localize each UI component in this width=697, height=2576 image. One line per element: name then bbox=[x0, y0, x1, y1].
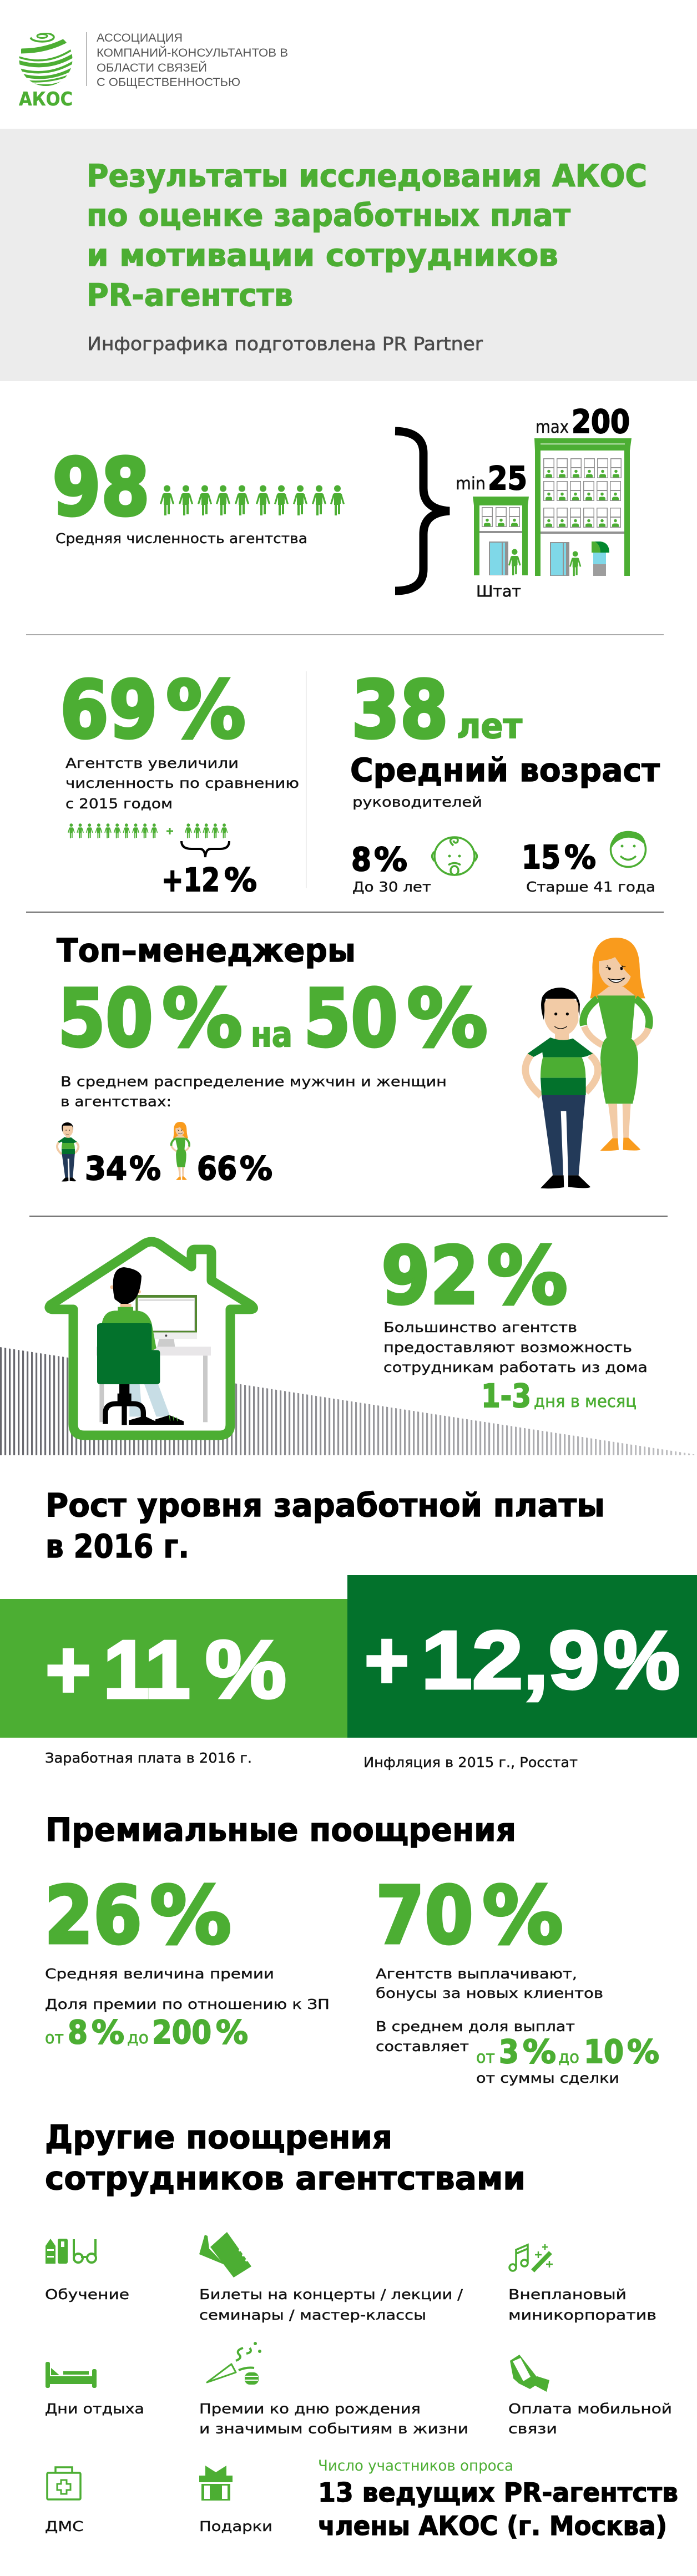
item: health insurance: ДМС bbox=[45, 2518, 84, 2534]
number 92 percent: 92 bbox=[381, 1229, 479, 1322]
association name: КОМПАНИЙ-КОНСУЛЬТАНТОВ В bbox=[97, 46, 288, 59]
bar: inflation: + bbox=[365, 1615, 409, 1706]
icon: small woman bbox=[171, 1122, 189, 1180]
bar: inflation: 12,9 bbox=[421, 1615, 599, 1706]
stat: over 41: % bbox=[564, 838, 596, 876]
icon: small people bbox=[68, 823, 228, 838]
bonus size text: Средняя величина премии bbox=[45, 1966, 274, 1982]
gender distribution text bbox=[60, 1074, 447, 1110]
stat: under 30: 8 bbox=[351, 841, 371, 878]
icon: curly brace bbox=[395, 431, 449, 591]
icon: bed bbox=[46, 2362, 97, 2388]
item: tickets bbox=[199, 2232, 463, 2323]
stat: women share: % bbox=[240, 1150, 272, 1187]
header logo bbox=[18, 32, 288, 110]
item: corporate party bbox=[508, 2244, 656, 2323]
item: mobile bill: Оплата мобильной bbox=[508, 2401, 672, 2417]
growth text: численность по сравнению bbox=[65, 775, 299, 791]
plus 12 percent: +12 bbox=[161, 861, 220, 899]
staff label: Штат bbox=[476, 582, 521, 600]
illustration: house with worker bbox=[49, 1242, 254, 1435]
item: health insurance bbox=[45, 2467, 84, 2534]
range 8 to 200 percent: % bbox=[216, 2013, 248, 2051]
range 8 to 200 percent bbox=[45, 2013, 248, 2051]
new client bonus text: Агентств выплачивают, bbox=[376, 1966, 577, 1982]
plus 12 percent: % bbox=[224, 861, 257, 899]
stat: women share bbox=[197, 1150, 272, 1187]
50 on 50 percent: % bbox=[407, 972, 488, 1065]
stat: under 30 bbox=[351, 841, 431, 895]
number 92 percent: % bbox=[487, 1229, 568, 1322]
50 on 50 percent: % bbox=[162, 972, 243, 1065]
number 92 percent bbox=[381, 1229, 568, 1322]
decorative stripes bbox=[0, 1347, 697, 1455]
days per month: дня в месяц bbox=[534, 1392, 637, 1411]
illustration: woman and man bbox=[526, 938, 649, 1188]
range 8 to 200 percent: от bbox=[45, 2028, 64, 2048]
bar: salary: % bbox=[205, 1624, 286, 1715]
icon: small man bbox=[57, 1122, 78, 1182]
number 38 years: 38 bbox=[351, 664, 448, 756]
icon: tickets bbox=[199, 2232, 251, 2278]
item: corporate party: миникорпоратив bbox=[508, 2307, 656, 2323]
50 on 50 percent bbox=[58, 972, 488, 1065]
number 69 percent: % bbox=[166, 664, 246, 756]
item: mobile bill bbox=[508, 2355, 672, 2437]
stat: over 41: 15 bbox=[522, 838, 560, 876]
number 38 years bbox=[351, 664, 522, 756]
min label: min bbox=[456, 474, 486, 494]
stat: men share bbox=[85, 1150, 161, 1187]
bar: salary bbox=[0, 1599, 347, 1738]
stat: under 30: До 30 лет bbox=[352, 879, 431, 895]
survey participants: члены АКОС (г. Москва) bbox=[318, 2511, 667, 2542]
growth text: Агентств увеличили bbox=[65, 755, 239, 771]
stat: under 30: % bbox=[374, 841, 407, 878]
title: Результаты исследования АКОС bbox=[87, 158, 647, 194]
panel: staff growth bbox=[60, 664, 299, 899]
remote work text bbox=[383, 1319, 648, 1375]
range 3 to 10 percent: от bbox=[476, 2048, 495, 2067]
range 3 to 10 percent: до bbox=[558, 2048, 579, 2067]
item: mobile bill: связи bbox=[508, 2421, 557, 2437]
range 3 to 10 percent bbox=[476, 2033, 659, 2071]
heading bbox=[46, 1486, 605, 1565]
title bbox=[87, 158, 647, 313]
caption: salary: Заработная плата в 2016 г. bbox=[45, 1750, 252, 1766]
stat: over 41 bbox=[522, 838, 655, 895]
item: training: Обучение bbox=[45, 2286, 129, 2302]
50 on 50 percent: 50 bbox=[304, 972, 398, 1065]
number 98: 98 bbox=[52, 441, 150, 534]
heading bbox=[45, 2118, 526, 2197]
item: tickets: семинары / мастер-классы bbox=[199, 2307, 426, 2323]
title panel bbox=[0, 129, 697, 381]
panel: salary growth bbox=[0, 1486, 697, 1770]
association name: АССОЦИАЦИЯ bbox=[97, 32, 183, 44]
title: и мотивации сотрудников bbox=[87, 237, 558, 273]
max label bbox=[536, 403, 630, 441]
item: gifts: Подарки bbox=[199, 2518, 272, 2534]
stat: men share: 34 bbox=[85, 1150, 127, 1187]
item: birthday bonus: и значимым событиям в жизни bbox=[199, 2421, 468, 2437]
item: tickets: Билеты на концерты / лекции / bbox=[199, 2286, 463, 2302]
heading: Премиальные поощрения bbox=[46, 1811, 516, 1849]
item: training bbox=[45, 2239, 129, 2302]
heading: Средний возраст bbox=[350, 751, 660, 789]
caption: Средняя численность агентства bbox=[55, 530, 307, 546]
gender distribution text: В среднем распределение мужчин и женщин bbox=[60, 1074, 447, 1090]
association name bbox=[97, 32, 288, 89]
range 3 to 10 percent: 3 bbox=[499, 2033, 519, 2071]
growth text: с 2015 годом bbox=[65, 796, 173, 812]
max label: 200 bbox=[572, 403, 630, 441]
new client bonus text: бонусы за новых клиентов bbox=[376, 1985, 603, 2001]
range 3 to 10 percent: % bbox=[627, 2033, 659, 2071]
association name: ОБЛАСТИ СВЯЗЕЙ bbox=[97, 61, 207, 74]
days per month: 1-3 bbox=[481, 1377, 531, 1415]
icon: striped globe bbox=[18, 33, 73, 85]
item: days off bbox=[45, 2362, 144, 2417]
icon: gift box bbox=[199, 2466, 233, 2501]
subheading: руководителей bbox=[352, 794, 482, 810]
bar: salary: 11 bbox=[103, 1624, 190, 1715]
50 on 50 percent: 50 bbox=[58, 972, 153, 1065]
item: days off: Дни отдыха bbox=[45, 2401, 144, 2417]
50 on 50 percent: на bbox=[251, 1014, 292, 1055]
number 69 percent: 69 bbox=[60, 664, 158, 756]
large building bbox=[534, 438, 632, 576]
remote work text: Большинство агентств bbox=[383, 1319, 577, 1335]
range 8 to 200 percent: 8 bbox=[68, 2013, 88, 2051]
survey participants: Число участников опроса bbox=[318, 2457, 513, 2474]
range 8 to 200 percent: 200 bbox=[152, 2013, 211, 2051]
new client bonus text bbox=[376, 1966, 603, 2054]
panel: bonuses bbox=[44, 1811, 659, 2086]
heading: в 2016 г. bbox=[46, 1527, 189, 1565]
bonus size text bbox=[45, 1966, 330, 2012]
range 8 to 200 percent: % bbox=[92, 2013, 124, 2051]
panel: average age bbox=[350, 664, 660, 895]
number 26 percent bbox=[44, 1869, 231, 1962]
bar: salary: + bbox=[46, 1624, 91, 1715]
min label bbox=[456, 459, 527, 497]
heading: Рост уровня заработной платы bbox=[46, 1486, 605, 1524]
caption: inflation: Инфляция в 2015 г., Росстат bbox=[363, 1754, 578, 1770]
association name: С ОБЩЕСТВЕННОСТЬЮ bbox=[97, 76, 240, 89]
icon: smiling face bbox=[610, 831, 646, 867]
panel: other incentives bbox=[45, 2118, 678, 2542]
number 38 years: лет bbox=[457, 706, 522, 746]
panel: remote work bbox=[0, 1229, 697, 1455]
heading: Другие поощрения bbox=[45, 2118, 392, 2156]
number 69 percent bbox=[60, 664, 246, 756]
item: birthday bonus bbox=[199, 2342, 468, 2437]
panel: average headcount bbox=[52, 403, 632, 600]
small building bbox=[473, 497, 529, 575]
gender distribution text: в агентствах: bbox=[60, 1094, 171, 1110]
logo wordmark: АКОС bbox=[19, 88, 73, 110]
remote work text: сотрудникам работать из дома bbox=[383, 1359, 648, 1375]
stat: over 41: Старше 41 года bbox=[526, 879, 655, 895]
max label: max bbox=[536, 417, 569, 437]
min label: 25 bbox=[488, 459, 527, 497]
days per month bbox=[481, 1377, 637, 1415]
stat: women share: 66 bbox=[197, 1150, 237, 1187]
panel: top managers bbox=[57, 932, 649, 1188]
survey participants bbox=[318, 2457, 678, 2542]
bar: inflation bbox=[347, 1575, 697, 1738]
subtitle: Инфографика подготовлена PR Partner bbox=[87, 333, 483, 355]
title: PR-агентств bbox=[87, 277, 293, 313]
growth text bbox=[65, 755, 299, 812]
icon: music and wand bbox=[509, 2244, 553, 2271]
new client bonus text: В среднем доля выплат bbox=[376, 2018, 575, 2035]
icon: row of people bbox=[160, 485, 345, 515]
number 26 percent: 26 bbox=[44, 1869, 142, 1962]
item: birthday bonus: Премии ко дню рождения bbox=[199, 2401, 421, 2417]
deal sum text: от суммы сделки bbox=[476, 2070, 619, 2086]
title: по оценке заработных плат bbox=[87, 198, 570, 233]
number 70 percent: % bbox=[482, 1869, 563, 1962]
icon: hand holding phone bbox=[510, 2355, 549, 2392]
item: corporate party: Внеплановый bbox=[508, 2286, 627, 2302]
heading: сотрудников агентствами bbox=[45, 2159, 526, 2197]
number 70 percent bbox=[376, 1869, 563, 1962]
range 3 to 10 percent: % bbox=[523, 2033, 556, 2071]
new client bonus text: составляет bbox=[376, 2038, 469, 2054]
range 8 to 200 percent: до bbox=[127, 2028, 149, 2048]
range 3 to 10 percent: 10 bbox=[584, 2033, 624, 2071]
icon: medical case bbox=[47, 2467, 80, 2499]
icon: books and glasses bbox=[46, 2239, 96, 2264]
bonus size text: Доля премии по отношению к ЗП bbox=[45, 1996, 330, 2012]
remote work text: предоставляют возможность bbox=[383, 1339, 632, 1355]
number 26 percent: % bbox=[150, 1869, 231, 1962]
heading: Топ–менеджеры bbox=[57, 932, 356, 969]
bar: inflation: % bbox=[603, 1615, 680, 1706]
survey participants: 13 ведущих PR-агентств bbox=[318, 2478, 678, 2508]
icon: confetti cone and coins bbox=[207, 2342, 261, 2385]
stat: men share: % bbox=[129, 1150, 161, 1187]
number 70 percent: 70 bbox=[376, 1869, 473, 1962]
item: gifts bbox=[199, 2466, 272, 2534]
icon: baby bbox=[432, 837, 477, 875]
icon: small brace bbox=[181, 841, 229, 857]
